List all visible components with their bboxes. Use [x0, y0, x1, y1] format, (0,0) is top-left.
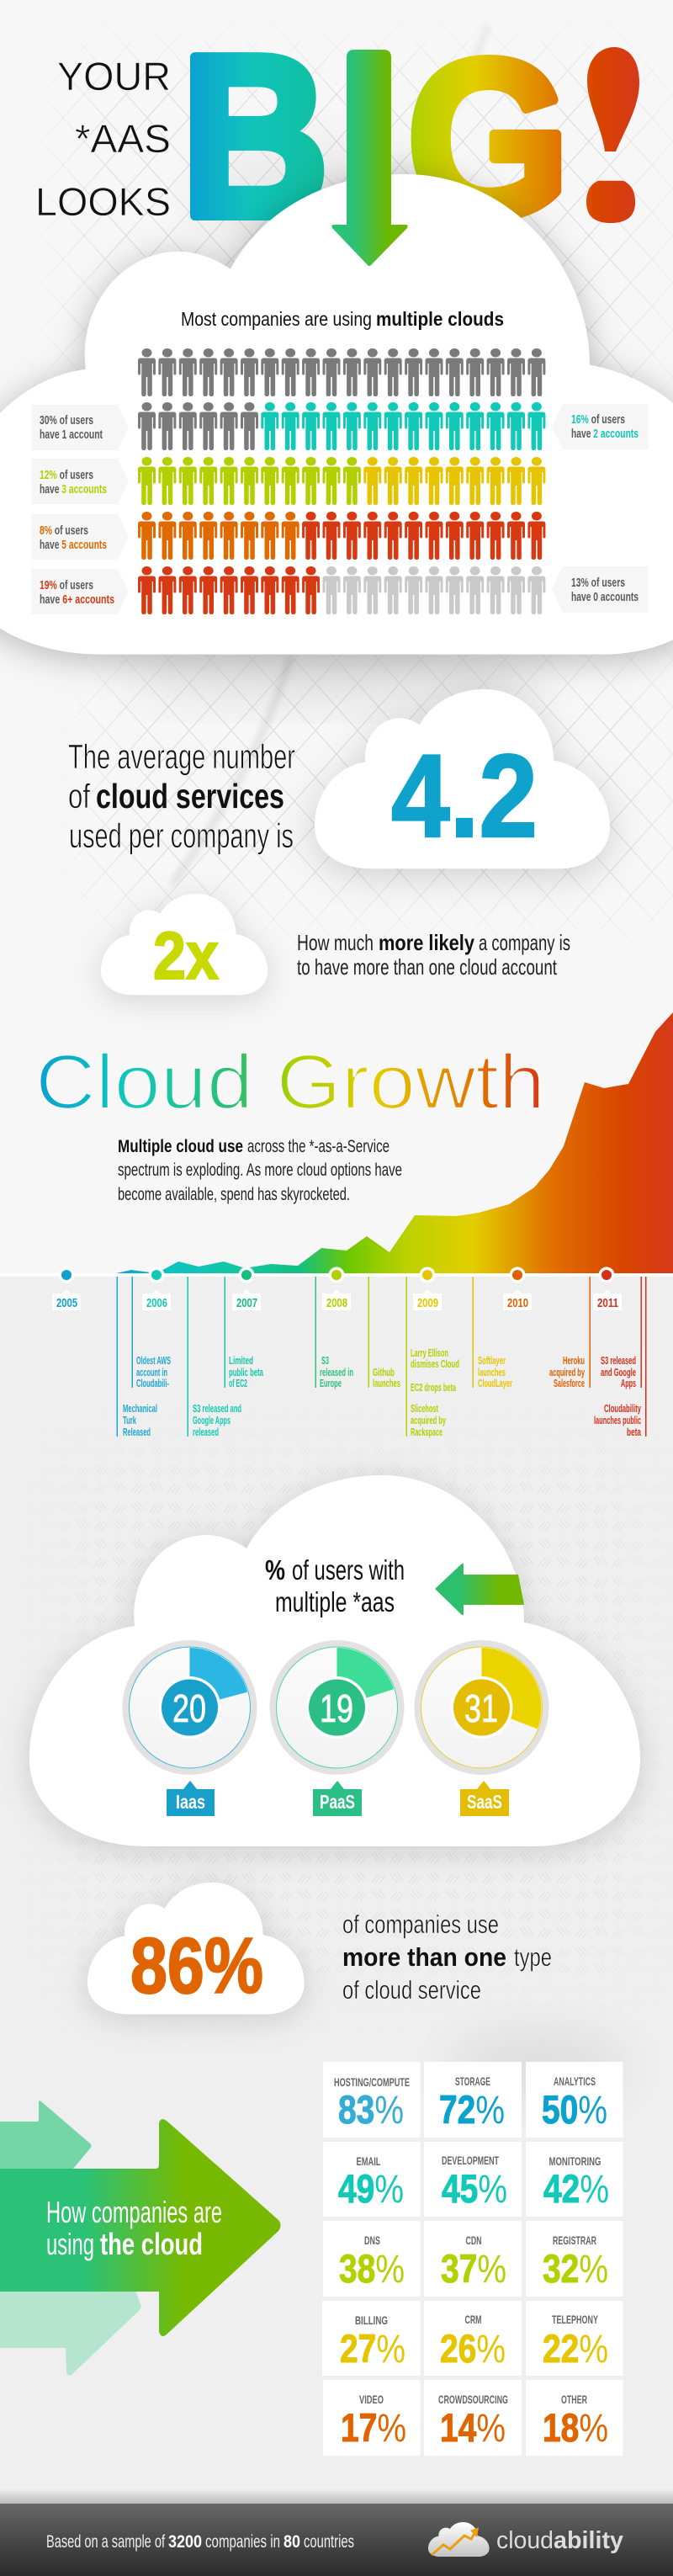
year tag 2009 [413, 1289, 442, 1310]
event: 2009 events: Rackspace [411, 1426, 442, 1438]
area chart [116, 1012, 673, 1273]
footer note: 80 [284, 2532, 300, 2552]
callout: 13% 0 accounts: 13% of users [571, 576, 625, 590]
stat: registrar: 32% [543, 2246, 608, 2291]
event: mechanical turk: Released [123, 1426, 151, 1438]
event: 2009 events: dismises Cloud [411, 1357, 459, 1370]
cloud: 4.2: 4.2 [391, 730, 538, 862]
stat: video [323, 2380, 421, 2456]
logo: cloudability: ability [554, 2527, 623, 2554]
stat: hosting/compute: 83% [338, 2087, 404, 2132]
footer note: countries [304, 2532, 354, 2552]
callout: 12% 3 accounts: 12% of users [40, 468, 93, 482]
event: limited beta ec2 [224, 1277, 263, 1389]
text: multiple cloud use: across the *-as-a-Service [247, 1137, 389, 1156]
heading: big: ! [557, 0, 670, 271]
heading: your *aas looks: YOUR [57, 54, 171, 98]
heading: cloud growth: Cloud Growth [35, 1039, 545, 1125]
event: softlayer [473, 1277, 512, 1389]
stat: monitoring [526, 2142, 623, 2217]
heading: % of users with multiple aas: of users with [292, 1554, 405, 1585]
row 3 people [138, 457, 545, 505]
event: cloudability launch: Cloudability [604, 1402, 641, 1415]
label: paas: PaaS [320, 1791, 355, 1813]
heading: your *aas looks: LOOKS [35, 179, 171, 224]
callout: 30% 1 account [31, 405, 129, 450]
dial: saas: 31 [464, 1686, 498, 1730]
event: softlayer: CloudLayer [478, 1377, 512, 1389]
cloud: 4.2 [315, 689, 610, 868]
event: 2009 events: Larry Ellison [411, 1346, 448, 1359]
dot 2010 [510, 1267, 525, 1283]
text: more than one type: of cloud service [342, 1975, 481, 2005]
people chart [138, 348, 545, 614]
stat: crowdsourcing [424, 2380, 522, 2456]
event: s3 europe [315, 1277, 353, 1389]
label: saas: SaaS [467, 1791, 502, 1813]
callout: 30% 1 account: have 1 account [40, 428, 103, 442]
year tag 2006: 2006 [146, 1296, 167, 1310]
stat: other: OTHER [561, 2393, 587, 2406]
dot 2005 [59, 1267, 74, 1283]
stat: crm [424, 2301, 522, 2376]
text: average number of cloud services: The average number [68, 737, 295, 776]
event: github launches [368, 1277, 400, 1389]
event: s3 and google apps 2011: and Google [601, 1366, 636, 1378]
arrow: how companies are using the cloud: using [46, 2227, 94, 2261]
event: oldest aws account: account in [136, 1366, 167, 1378]
stat: email: EMAIL [357, 2154, 381, 2168]
footer note: companies in [205, 2532, 280, 2552]
text: more than one type: more than one [342, 1942, 506, 1972]
stat: development: 45% [442, 2166, 507, 2211]
stat: hosting/compute: HOSTING/COMPUTE [334, 2075, 410, 2089]
heading: big [190, 47, 639, 223]
text: more than one type: of companies use [342, 1909, 499, 1939]
arrow: light green upper [0, 2101, 91, 2188]
event: s3 and google apps 2011: Apps [621, 1377, 636, 1389]
stat: billing: BILLING [355, 2313, 388, 2327]
event: heroku: Heroku [563, 1354, 585, 1367]
event: s3 europe: Europe [320, 1377, 342, 1389]
stat: monitoring: 42% [543, 2166, 609, 2211]
stat: email [323, 2142, 421, 2217]
text: more likely [297, 930, 570, 980]
footer note [46, 2532, 354, 2552]
event: s3 europe: released in [320, 1366, 353, 1378]
arrow: how companies are using the cloud: the cloud [100, 2227, 203, 2261]
stat: video: VIDEO [359, 2393, 384, 2406]
footer note: Based on a sample of [46, 2532, 165, 2552]
event: cloudability launch: beta [627, 1426, 641, 1438]
callout: 16% 2 accounts: 16% of users [571, 412, 625, 427]
dot 2008 [328, 1267, 345, 1283]
callout: 16% 2 accounts [552, 404, 649, 449]
text: average number of cloud services: of [68, 777, 90, 815]
event: s3 released 2006: S3 released and [193, 1402, 241, 1415]
dial: paas: 19 [320, 1686, 353, 1730]
event: cloudability launch [594, 1277, 646, 1438]
callout: 16% 2 accounts: have 2 accounts [571, 427, 639, 441]
stat: dns: 38% [339, 2246, 405, 2291]
heading: % of users with multiple aas [265, 1554, 405, 1617]
event: heroku [549, 1277, 591, 1389]
text: more than one type: type [514, 1942, 552, 1972]
callout: 30% 1 account: 30% of users [40, 413, 93, 428]
callout: 12% 3 accounts [31, 459, 129, 504]
stat: development: DEVELOPMENT [442, 2154, 499, 2167]
event: 2009 events: Slicehost [411, 1402, 438, 1415]
stat: cdn: 37% [441, 2246, 506, 2291]
callout: 19% 6+ accounts: have 6+ accounts [40, 592, 114, 607]
year tag 2007 [232, 1289, 261, 1310]
heading: multiple clouds: multiple clouds [376, 308, 504, 330]
callout: 19% 6+ accounts [31, 569, 129, 614]
text: more likely: more likely [379, 930, 474, 955]
logo: cloudability: cloud [496, 2527, 554, 2554]
event: 2009 events: acquired by [411, 1414, 446, 1426]
event: s3 released 2006 [187, 1277, 241, 1438]
heading: % of users with multiple aas: multiple *aas [275, 1586, 395, 1617]
event: softlayer: Softlayer [478, 1354, 506, 1367]
footer [0, 2488, 673, 2576]
dot 2007 [239, 1267, 254, 1283]
arrow: how companies are using the cloud [0, 2119, 281, 2336]
event: mechanical turk [116, 1277, 157, 1438]
stat: registrar [526, 2221, 623, 2297]
label: iaas [167, 1781, 215, 1816]
year tag 2011 [593, 1289, 622, 1310]
event: oldest aws account: Oldest AWS [136, 1354, 171, 1367]
event: oldest aws account: Cloudabili- [136, 1377, 169, 1389]
event: heroku: Salesforce [554, 1377, 585, 1389]
label: paas [313, 1781, 362, 1816]
text: multiple cloud use: spectrum is exploding. As more cloud options have [118, 1161, 402, 1180]
heading: your *aas looks: *AAS [75, 116, 171, 161]
stat: analytics: ANALYTICS [554, 2074, 596, 2088]
cloud: 2x: 2x [153, 918, 219, 993]
stat: cdn [424, 2221, 522, 2297]
text: multiple cloud use: Multiple cloud use [118, 1137, 243, 1156]
year tag 2008 [322, 1289, 351, 1310]
stat: billing: 27% [340, 2326, 405, 2371]
event: s3 and google apps 2011: S3 released [601, 1354, 636, 1367]
callout: 8% 5 accounts: have 5 accounts [40, 538, 107, 552]
callout: 19% 6+ accounts: 19% of users [40, 578, 93, 592]
year tag 2005: 2005 [56, 1296, 77, 1310]
text: more than one type [342, 1909, 552, 2005]
dot 2006 [148, 1267, 165, 1283]
text: more likely: a company is [479, 930, 570, 955]
label: saas [460, 1781, 509, 1816]
year tag 2008: 2008 [326, 1296, 347, 1310]
stat: billing [322, 2301, 421, 2376]
event: github launches: Github [373, 1366, 395, 1378]
row 4 people [138, 512, 545, 560]
event: limited beta ec2: Limited [229, 1354, 253, 1367]
text: more likely: How much [297, 930, 374, 955]
cloud: 86% [87, 1883, 305, 2015]
event: s3 and google apps 2011 [601, 1277, 642, 1389]
stat: registrar: REGISTRAR [553, 2233, 596, 2247]
callout: 13% 0 accounts: have 0 accounts [571, 590, 639, 604]
stat: storage [424, 2062, 522, 2138]
stat: analytics [526, 2062, 623, 2138]
text: average number of cloud services: cloud services [96, 777, 284, 815]
heading: big: G [407, 14, 570, 263]
year tag 2007: 2007 [236, 1296, 257, 1310]
arrow: pointing left [435, 1564, 524, 1615]
row 2 people [138, 402, 545, 450]
cloud: 2x [101, 894, 268, 995]
main cloud [0, 174, 673, 655]
row 5 people [138, 566, 545, 614]
year tag 2006 [142, 1289, 171, 1310]
dial: iaas [123, 1640, 257, 1775]
event: s3 europe: S3 [321, 1354, 329, 1367]
callout: 13% 0 accounts [552, 566, 649, 613]
event: limited beta ec2: public beta [229, 1366, 263, 1378]
heading: multiple clouds [181, 308, 504, 330]
stat: crm: CRM [464, 2313, 481, 2326]
stat: crm: 26% [440, 2326, 506, 2371]
stat: hosting/compute [323, 2062, 421, 2138]
text: more likely: to have more than one cloud account [297, 954, 558, 980]
label: iaas: Iaas [176, 1791, 205, 1813]
stat: crowdsourcing: 14% [440, 2405, 506, 2450]
dial: iaas: 20 [172, 1686, 206, 1730]
text: multiple cloud use: become available, spend has skyrocketed. [118, 1185, 350, 1204]
footer note: 3200 [168, 2532, 202, 2552]
stat: telephony: 22% [543, 2326, 608, 2371]
heading: multiple clouds: Most companies are using [181, 308, 372, 330]
stat: telephony: TELEPHONY [552, 2313, 598, 2326]
year tag 2010: 2010 [507, 1296, 528, 1310]
stat: video: 17% [341, 2405, 406, 2450]
stat: development [424, 2142, 522, 2217]
arrow: pale green lower [0, 2272, 141, 2376]
event: heroku: acquired by [549, 1366, 585, 1378]
callout: 8% 5 accounts [31, 514, 129, 560]
stat: storage: 72% [439, 2087, 505, 2132]
arrow: how companies are using the cloud: How companies are [46, 2195, 222, 2229]
text: multiple cloud use [118, 1137, 402, 1204]
stat: other [526, 2380, 623, 2456]
stat: crowdsourcing: CROWDSOURCING [438, 2393, 508, 2406]
event: github launches: launches [373, 1377, 400, 1389]
arrow: i of big [331, 50, 408, 266]
dial: saas [414, 1640, 548, 1775]
stat: cdn: CDN [466, 2233, 481, 2247]
dot 2009 [419, 1267, 436, 1283]
heading: % of users with multiple aas: % [265, 1554, 285, 1585]
heading: big: B [181, 8, 329, 264]
dot 2011 [599, 1267, 614, 1283]
event: oldest aws account [131, 1277, 171, 1389]
year tag 2010 [503, 1289, 532, 1310]
row 1 people [138, 348, 545, 396]
callout: 8% 5 accounts: 8% of users [40, 523, 88, 538]
event: limited beta ec2: of EC2 [229, 1377, 247, 1389]
year tag 2011: 2011 [597, 1296, 618, 1310]
cloud: % of users [29, 1475, 640, 1846]
year tag 2009: 2009 [417, 1296, 438, 1310]
logo: cloudability [428, 2522, 623, 2557]
event: mechanical turk: Turk [123, 1414, 136, 1426]
stat: analytics: 50% [542, 2087, 607, 2132]
text: average number of cloud services [68, 737, 295, 855]
stat: telephony [526, 2301, 623, 2376]
dial: paas [269, 1640, 404, 1775]
stat: other: 18% [543, 2405, 608, 2450]
event: softlayer: launches [478, 1366, 506, 1378]
stat: dns: DNS [364, 2233, 380, 2247]
stat: email: 49% [338, 2166, 404, 2211]
heading: your *aas looks [35, 54, 171, 224]
text: average number of cloud services: used per company is [69, 816, 294, 855]
stat: storage: STORAGE [455, 2074, 490, 2088]
stat: monitoring: MONITORING [548, 2154, 601, 2168]
event: 2009 events: EC2 drops beta [411, 1381, 456, 1394]
callout: 12% 3 accounts: have 3 accounts [40, 482, 107, 497]
timeline axis [0, 1267, 673, 1283]
event: mechanical turk: Mechanical [123, 1402, 157, 1415]
year tag 2005 [52, 1289, 81, 1310]
cloud: 86%: 86% [130, 1921, 263, 2010]
event: s3 released 2006: released [193, 1426, 219, 1438]
stat: dns [323, 2221, 421, 2297]
event: s3 released 2006: Google Apps [193, 1414, 231, 1426]
event: 2009 events [405, 1277, 459, 1438]
